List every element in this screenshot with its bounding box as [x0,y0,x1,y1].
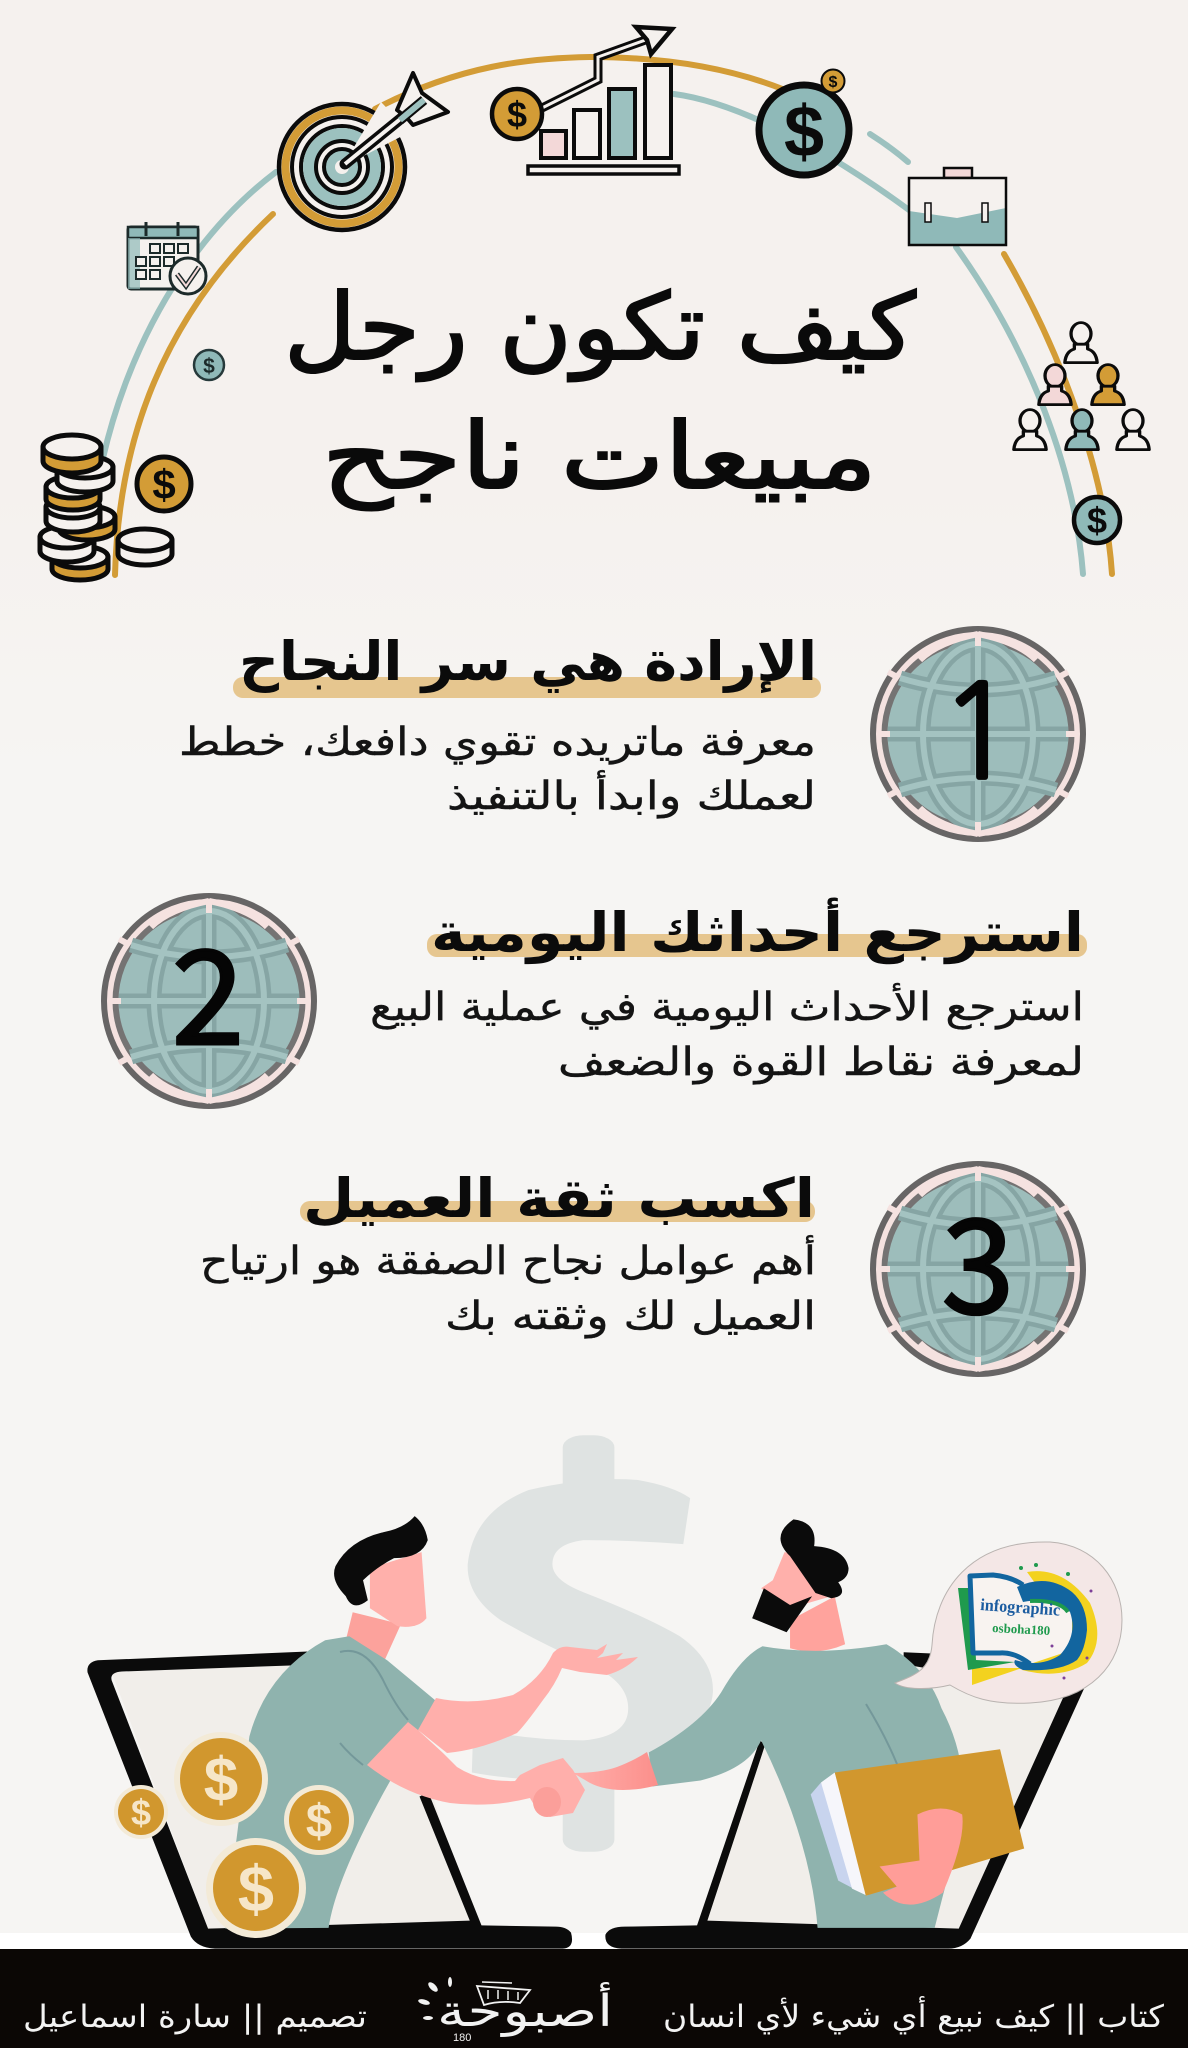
icon: calendar with check [128,222,206,294]
step 2 body: استرجع الأحداث اليومية في عملية البيع [370,982,1084,1030]
icon: small teal coin [194,350,224,380]
icon: bar chart with arrow: $ [507,94,527,135]
step 2 [104,894,1087,1106]
icon: target with arrow [279,73,448,230]
handshake illustration [87,1435,1090,1949]
left man [225,1516,435,1929]
gold coins: $ [306,1794,332,1847]
icon: gold dollar coin: $ [152,461,176,508]
right man [649,1519,1024,1928]
step 3 heading: اكسب ثقة العميل [303,1167,815,1230]
shirt fold lines [340,1651,897,1765]
gold coins: $ [238,1852,274,1925]
step 1 body [179,720,816,819]
footer left credit: تصميم || سارة اسماعيل [23,1999,367,2035]
footer logo: 180 [453,2032,471,2044]
icon: large dollar coin: $ [829,74,838,91]
step 1 [179,629,1083,839]
folder and papers [811,1749,1024,1905]
footer logo [418,1977,613,2044]
footer bar [0,1949,1188,2048]
infographic logo: infographic [980,1595,1061,1620]
step 3 body: أهم عوامل نجاح الصفقة هو ارتياح [200,1235,816,1284]
title: مبيعات ناجح [322,403,877,511]
icon: gold dollar coin [137,457,191,511]
icon: bar chart with arrow [492,27,679,174]
title: كيف تكون رجل [284,274,916,382]
title [284,274,916,511]
infographic logo: osboha180 [992,1620,1051,1638]
right man wrist [573,1752,658,1790]
infographic logo [958,1563,1097,1685]
step 1 body: معرفة ماتريده تقوي دافعك، خطط [179,720,816,765]
step 1 globe badge [873,629,1083,839]
step 2 body: لمعرفة نقاط القوة والضعف [558,1040,1084,1085]
step 2 globe badge: 2 [172,894,244,1082]
step 3 highlight bar [300,1201,815,1222]
step 3 body: العميل لك وثقته بك [445,1294,816,1339]
step 2 highlight bar [427,934,1087,957]
icon: large dollar coin: $ [784,92,824,172]
step 3 [200,1163,1083,1374]
step 2 body [370,982,1084,1085]
gold coins: $ [204,1746,238,1815]
icon: teal coin bottom right: $ [1087,500,1107,541]
icon: teal coin bottom right [1074,497,1120,543]
step 3 globe badge: 3 [942,1163,1014,1351]
speech bubble [895,1542,1122,1703]
footer right credit: كتاب || كيف نبيع أي شيء لأي انسان [663,1996,1164,2035]
left man arms [367,1644,638,1817]
left laptop [87,1651,572,1949]
gold coins [114,1732,354,1938]
step 2 globe badge [104,894,314,1106]
large dollar sign background [468,1435,713,1852]
icon: small teal coin: $ [203,355,215,378]
step 1 highlight bar [233,677,821,698]
gold coins: $ [131,1792,151,1833]
step 3 globe badge [873,1163,1083,1374]
right laptop [605,1652,1090,1949]
icon: stacked coins [40,435,172,580]
step 1 globe badge: 1 [939,667,1017,797]
icon: briefcase [909,168,1006,245]
step 2 heading: استرجع أحداثك اليومية [431,897,1084,964]
step 1 heading: الإرادة هي سر النجاح [239,630,817,693]
step 3 body [200,1235,816,1339]
icon: people network [1014,323,1149,450]
footer logo: أصبوحة [437,1982,613,2037]
icon: large dollar coin [759,70,849,175]
arc lines [88,57,1112,575]
step 1 body: لعملك وابدأ بالتنفيذ [447,770,816,819]
